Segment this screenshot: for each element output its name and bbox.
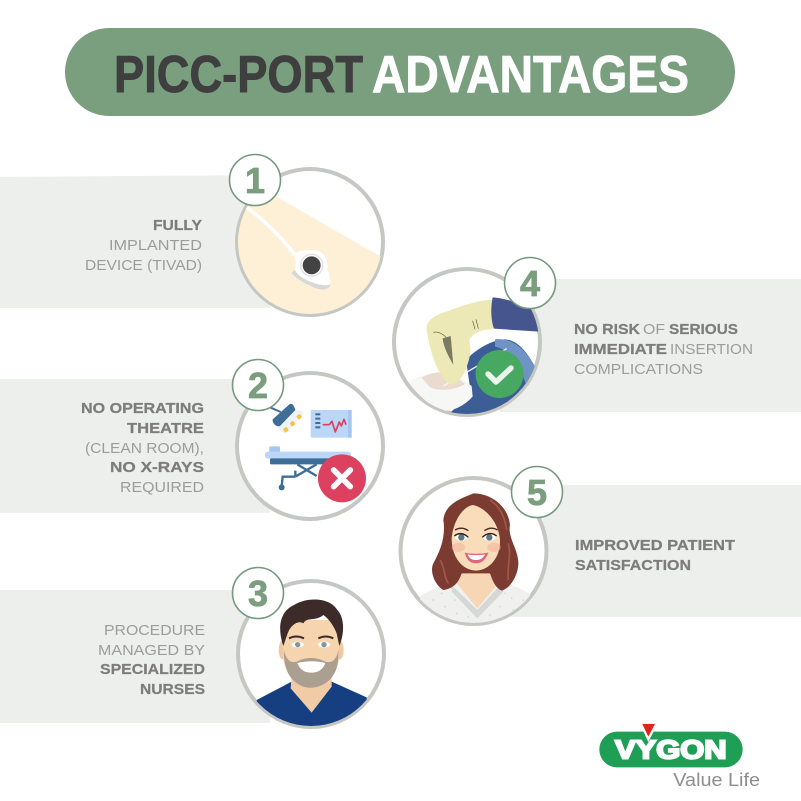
title banner [65, 28, 735, 116]
badge 2 [232, 360, 284, 410]
panel 4 illustration: gloved hand insertion [394, 269, 540, 415]
badge 4 [504, 258, 556, 308]
panel 4 background band [500, 279, 801, 412]
panel 4 text [574, 321, 753, 378]
panel 5 text: IMPROVED PATIENT [575, 537, 735, 554]
badge 3 [232, 568, 284, 618]
panel 2 text: THEATRE [127, 420, 204, 437]
logo: Vygon [599, 724, 760, 790]
panel 2 text [81, 400, 204, 496]
panel 4 text: IMMEDIATE [574, 341, 667, 358]
panel 1: fully implanted device [0, 154, 385, 317]
panel 1 text: FULLY [153, 217, 202, 234]
red cross mark [318, 454, 366, 502]
badge 2: 2 [248, 365, 268, 406]
badge 1: 1 [245, 160, 265, 201]
title banner: PICC-PORT [114, 46, 363, 104]
badge 1 [230, 154, 280, 206]
panel 4: no risk of complications [394, 258, 801, 415]
panel 3: specialized nurses [0, 568, 384, 733]
panel 1 text: DEVICE (TIVAD) [85, 257, 202, 274]
title banner: ADVANTAGES [372, 46, 689, 104]
panel 2 text: NO X-RAYS [110, 459, 204, 476]
stretcher [265, 446, 351, 490]
panel 3 text: MANAGED BY [98, 642, 205, 659]
panel 4 text: NO RISK [574, 321, 640, 338]
logo: Vygon: VYGON [615, 735, 727, 765]
panel 2 text: NO OPERATING [81, 400, 204, 417]
panel 1 background band [0, 175, 270, 308]
panel 3 text: NURSES [140, 681, 205, 698]
panel 1 text [85, 217, 202, 274]
panel 1 illustration: implanted port [235, 167, 385, 317]
panel 4 text: COMPLICATIONS [574, 361, 703, 378]
panel 5: improved patient satisfaction [400, 466, 801, 633]
panel 5 text: SATISFACTION [575, 557, 691, 574]
badge 5 [512, 466, 562, 518]
panel 2: no operating theatre [0, 360, 383, 519]
panel 3 illustration: male nurse [238, 581, 384, 733]
panel 2 text: (CLEAN ROOM), [85, 440, 204, 457]
panel 4 text: OF [643, 321, 665, 338]
panel 1 text: IMPLANTED [109, 237, 202, 254]
badge 5: 5 [527, 472, 547, 513]
monitor [311, 410, 352, 438]
panel 5 text [575, 537, 735, 574]
badge 4: 4 [520, 263, 540, 304]
panel 2 text: REQUIRED [120, 479, 204, 496]
panel 2 background band [0, 379, 270, 513]
panel 3 text: SPECIALIZED [100, 661, 205, 678]
panel 4 text: INSERTION [670, 341, 753, 358]
green check mark [476, 350, 524, 398]
badge 3: 3 [248, 573, 268, 614]
panel 3 text: PROCEDURE [104, 622, 205, 639]
panel 5 background band [510, 485, 801, 617]
panel 3 background band [0, 590, 270, 723]
panel 4 text: SERIOUS [669, 321, 738, 338]
panel 3 text [98, 622, 205, 698]
panel 2 illustration: theatre equipment crossed out [237, 373, 383, 519]
surgical lamp [270, 404, 303, 433]
panel 5 illustration: smiling patient [400, 478, 546, 633]
logo: Vygon: Value Life [673, 769, 760, 790]
